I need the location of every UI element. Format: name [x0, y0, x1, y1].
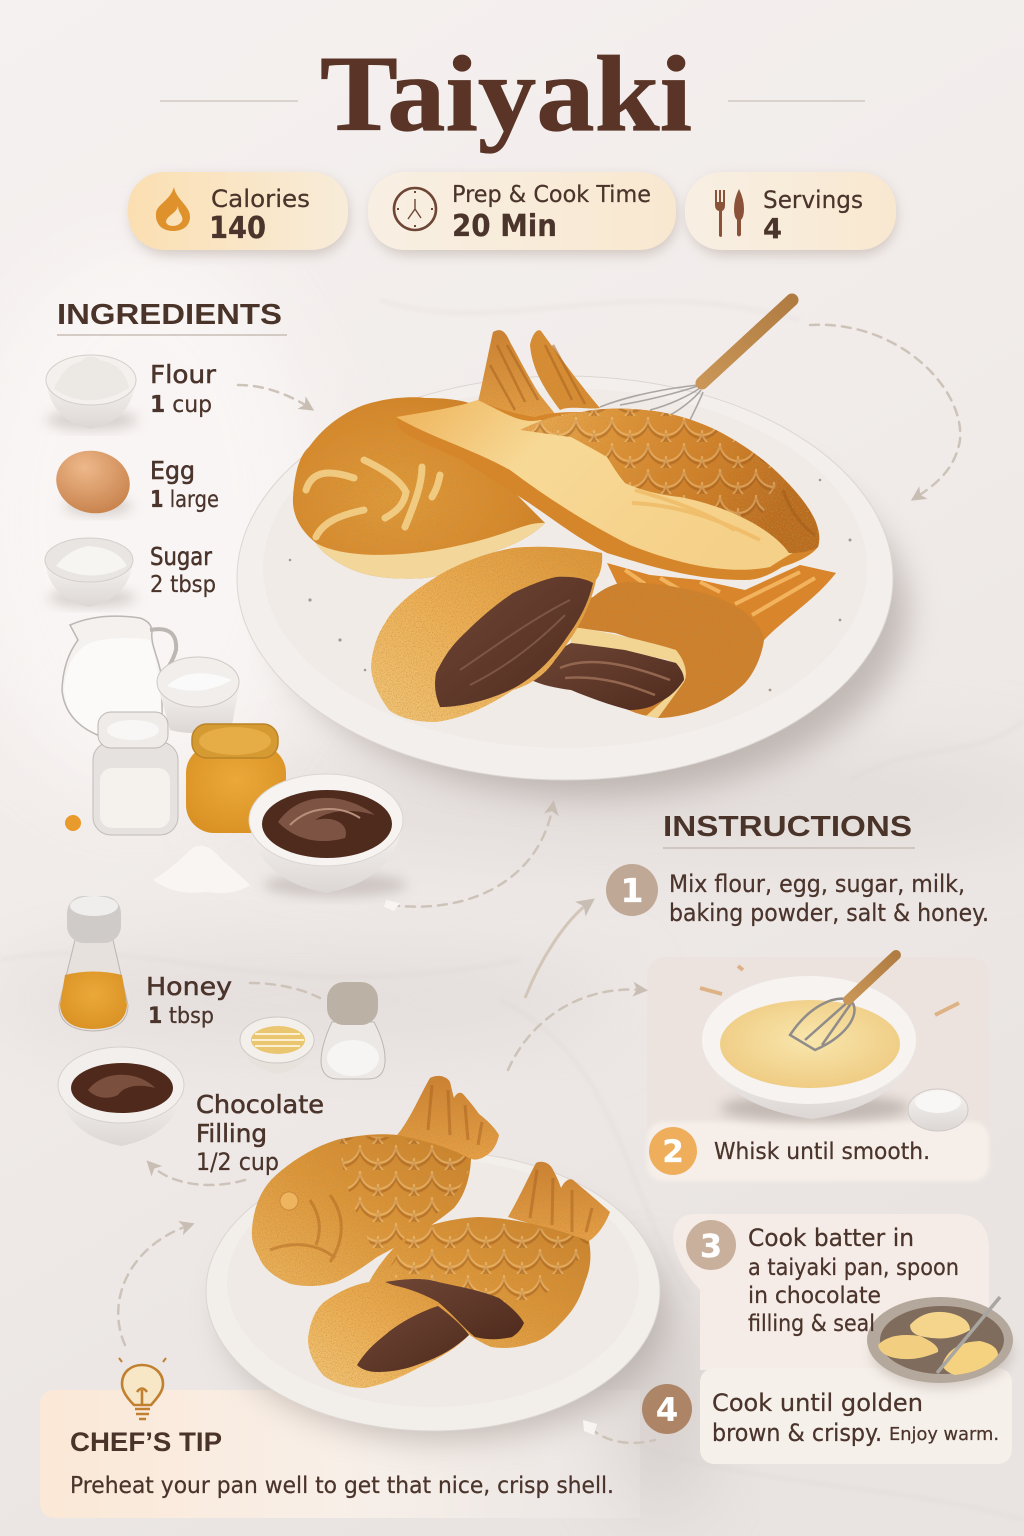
- stat pill: servings: 4: [763, 212, 782, 245]
- ingredient: egg: 1 large: [150, 487, 219, 513]
- icon: milk jug: [62, 616, 176, 736]
- step 3 and 4 card: [642, 1214, 1013, 1464]
- taiyaki: front whole: [369, 1162, 610, 1348]
- icon: flour pile: [153, 846, 250, 893]
- step 2 card: Whisk until smooth.: [714, 1139, 930, 1165]
- ingredient: honey: 1 tbsp: [148, 1004, 214, 1029]
- chef's tip card: [40, 1358, 640, 1518]
- step 3 and 4 card: Cook until golden: [712, 1389, 923, 1417]
- number badge 2: [649, 1127, 697, 1175]
- number badge 3: 3: [700, 1227, 722, 1265]
- ingredient: chocolate filling: [58, 1047, 324, 1176]
- stat pill: prep and cook time: [368, 172, 677, 255]
- step 3 and 4 card: a taiyaki pan, spoon: [748, 1255, 959, 1281]
- ingredient: sugar: [45, 538, 216, 607]
- icon: light bulb: [119, 1358, 166, 1419]
- ingredient: flour: Flour: [150, 360, 217, 389]
- ingredient: sugar: 2 tbsp: [150, 572, 216, 598]
- ingredient: flour: [46, 355, 217, 430]
- stat pill: prep and cook time: 20 Min: [452, 209, 557, 244]
- step 3 and 4 card: filling & seal: [748, 1311, 875, 1337]
- chef's tip card: CHEF’S TIP: [70, 1427, 222, 1457]
- second plate of taiyaki: [206, 1076, 667, 1440]
- ingredient: egg: Egg: [150, 456, 195, 485]
- icon: flour bowl: [46, 355, 138, 430]
- icon: egg: [50, 444, 136, 520]
- icon: small powder bowl: [157, 657, 240, 733]
- icon: honey jar: [186, 724, 286, 833]
- taiyaki: back whole: [252, 1076, 499, 1286]
- icon: flour jar: [93, 712, 178, 835]
- icon: batter bowl: [700, 955, 968, 1131]
- number badge 2: 2: [662, 1134, 684, 1170]
- icon: clock: [394, 188, 436, 230]
- ingredient: flour: 1 cup: [150, 392, 212, 418]
- ingredient: egg: [50, 444, 219, 520]
- taiyaki: chocolate half right: [531, 563, 836, 718]
- stat pill: calories: [128, 172, 349, 255]
- icon: flame: [156, 187, 190, 231]
- step 1: baking powder, salt & honey.: [669, 899, 989, 927]
- ingredient: honey: [59, 896, 232, 1031]
- icon: salt shaker: [321, 982, 385, 1079]
- number badge 4: [642, 1384, 692, 1434]
- ingredient: sugar: Sugar: [150, 542, 213, 571]
- icon: pan with cakes: [867, 1297, 1013, 1388]
- ingredient: chocolate filling: 1/2 cup: [196, 1148, 279, 1176]
- ingredient: honey: Honey: [146, 972, 232, 1001]
- taiyaki: left whole: [293, 397, 545, 579]
- step 3 and 4 card: Cook batter in: [748, 1224, 914, 1252]
- icon: honey bottle: [59, 896, 128, 1031]
- icon: sugar bowl: [45, 538, 136, 607]
- heading: instructions: INSTRUCTIONS: [663, 811, 912, 843]
- main plate of taiyaki: [237, 300, 908, 797]
- icon: orange bead: [65, 815, 81, 831]
- number badge 3: [686, 1220, 736, 1270]
- ingredient still life: milk, jars, chocolate: [62, 616, 407, 897]
- stat pill: servings: Servings: [763, 186, 863, 214]
- stat pill: prep and cook time: Prep & Cook Time: [452, 182, 651, 208]
- whisk: [600, 300, 792, 420]
- heading: ingredients: INGREDIENTS: [57, 299, 282, 331]
- step 2 card: [647, 955, 989, 1181]
- step 3 and 4 card: in chocolate: [748, 1283, 881, 1309]
- icon: butter dish: [240, 1017, 314, 1074]
- taiyaki: chocolate half: [308, 1282, 469, 1388]
- number badge 4: 4: [656, 1391, 678, 1429]
- ingredient: chocolate filling: Filling: [196, 1119, 267, 1148]
- step 1: [606, 864, 989, 927]
- flow arrows: [118, 325, 960, 1443]
- step 3 and 4 card: brown & crispy.: [712, 1419, 882, 1447]
- step 1: Mix flour, egg, sugar, milk,: [669, 870, 965, 898]
- number badge 1: [606, 864, 658, 916]
- icon: chocolate bowl: [249, 774, 407, 897]
- icon: fork and knife: [715, 189, 744, 237]
- number badge 1: 1: [621, 871, 643, 910]
- chef's tip card: Preheat your pan well to get that nice, crisp shell.: [70, 1473, 614, 1499]
- stat pill: calories: Calories: [211, 185, 310, 213]
- taiyaki: chocolate half left: [371, 547, 602, 722]
- taiyaki: large sliced: [396, 330, 819, 580]
- ingredient: chocolate filling: Chocolate: [196, 1090, 324, 1119]
- stat pill: servings: [685, 172, 896, 255]
- step 3 and 4 card: Enjoy warm.: [889, 1424, 999, 1445]
- stat pill: calories: 140: [209, 211, 266, 246]
- icon: chocolate dish: [58, 1047, 184, 1146]
- title: Taiyaki: [320, 35, 692, 154]
